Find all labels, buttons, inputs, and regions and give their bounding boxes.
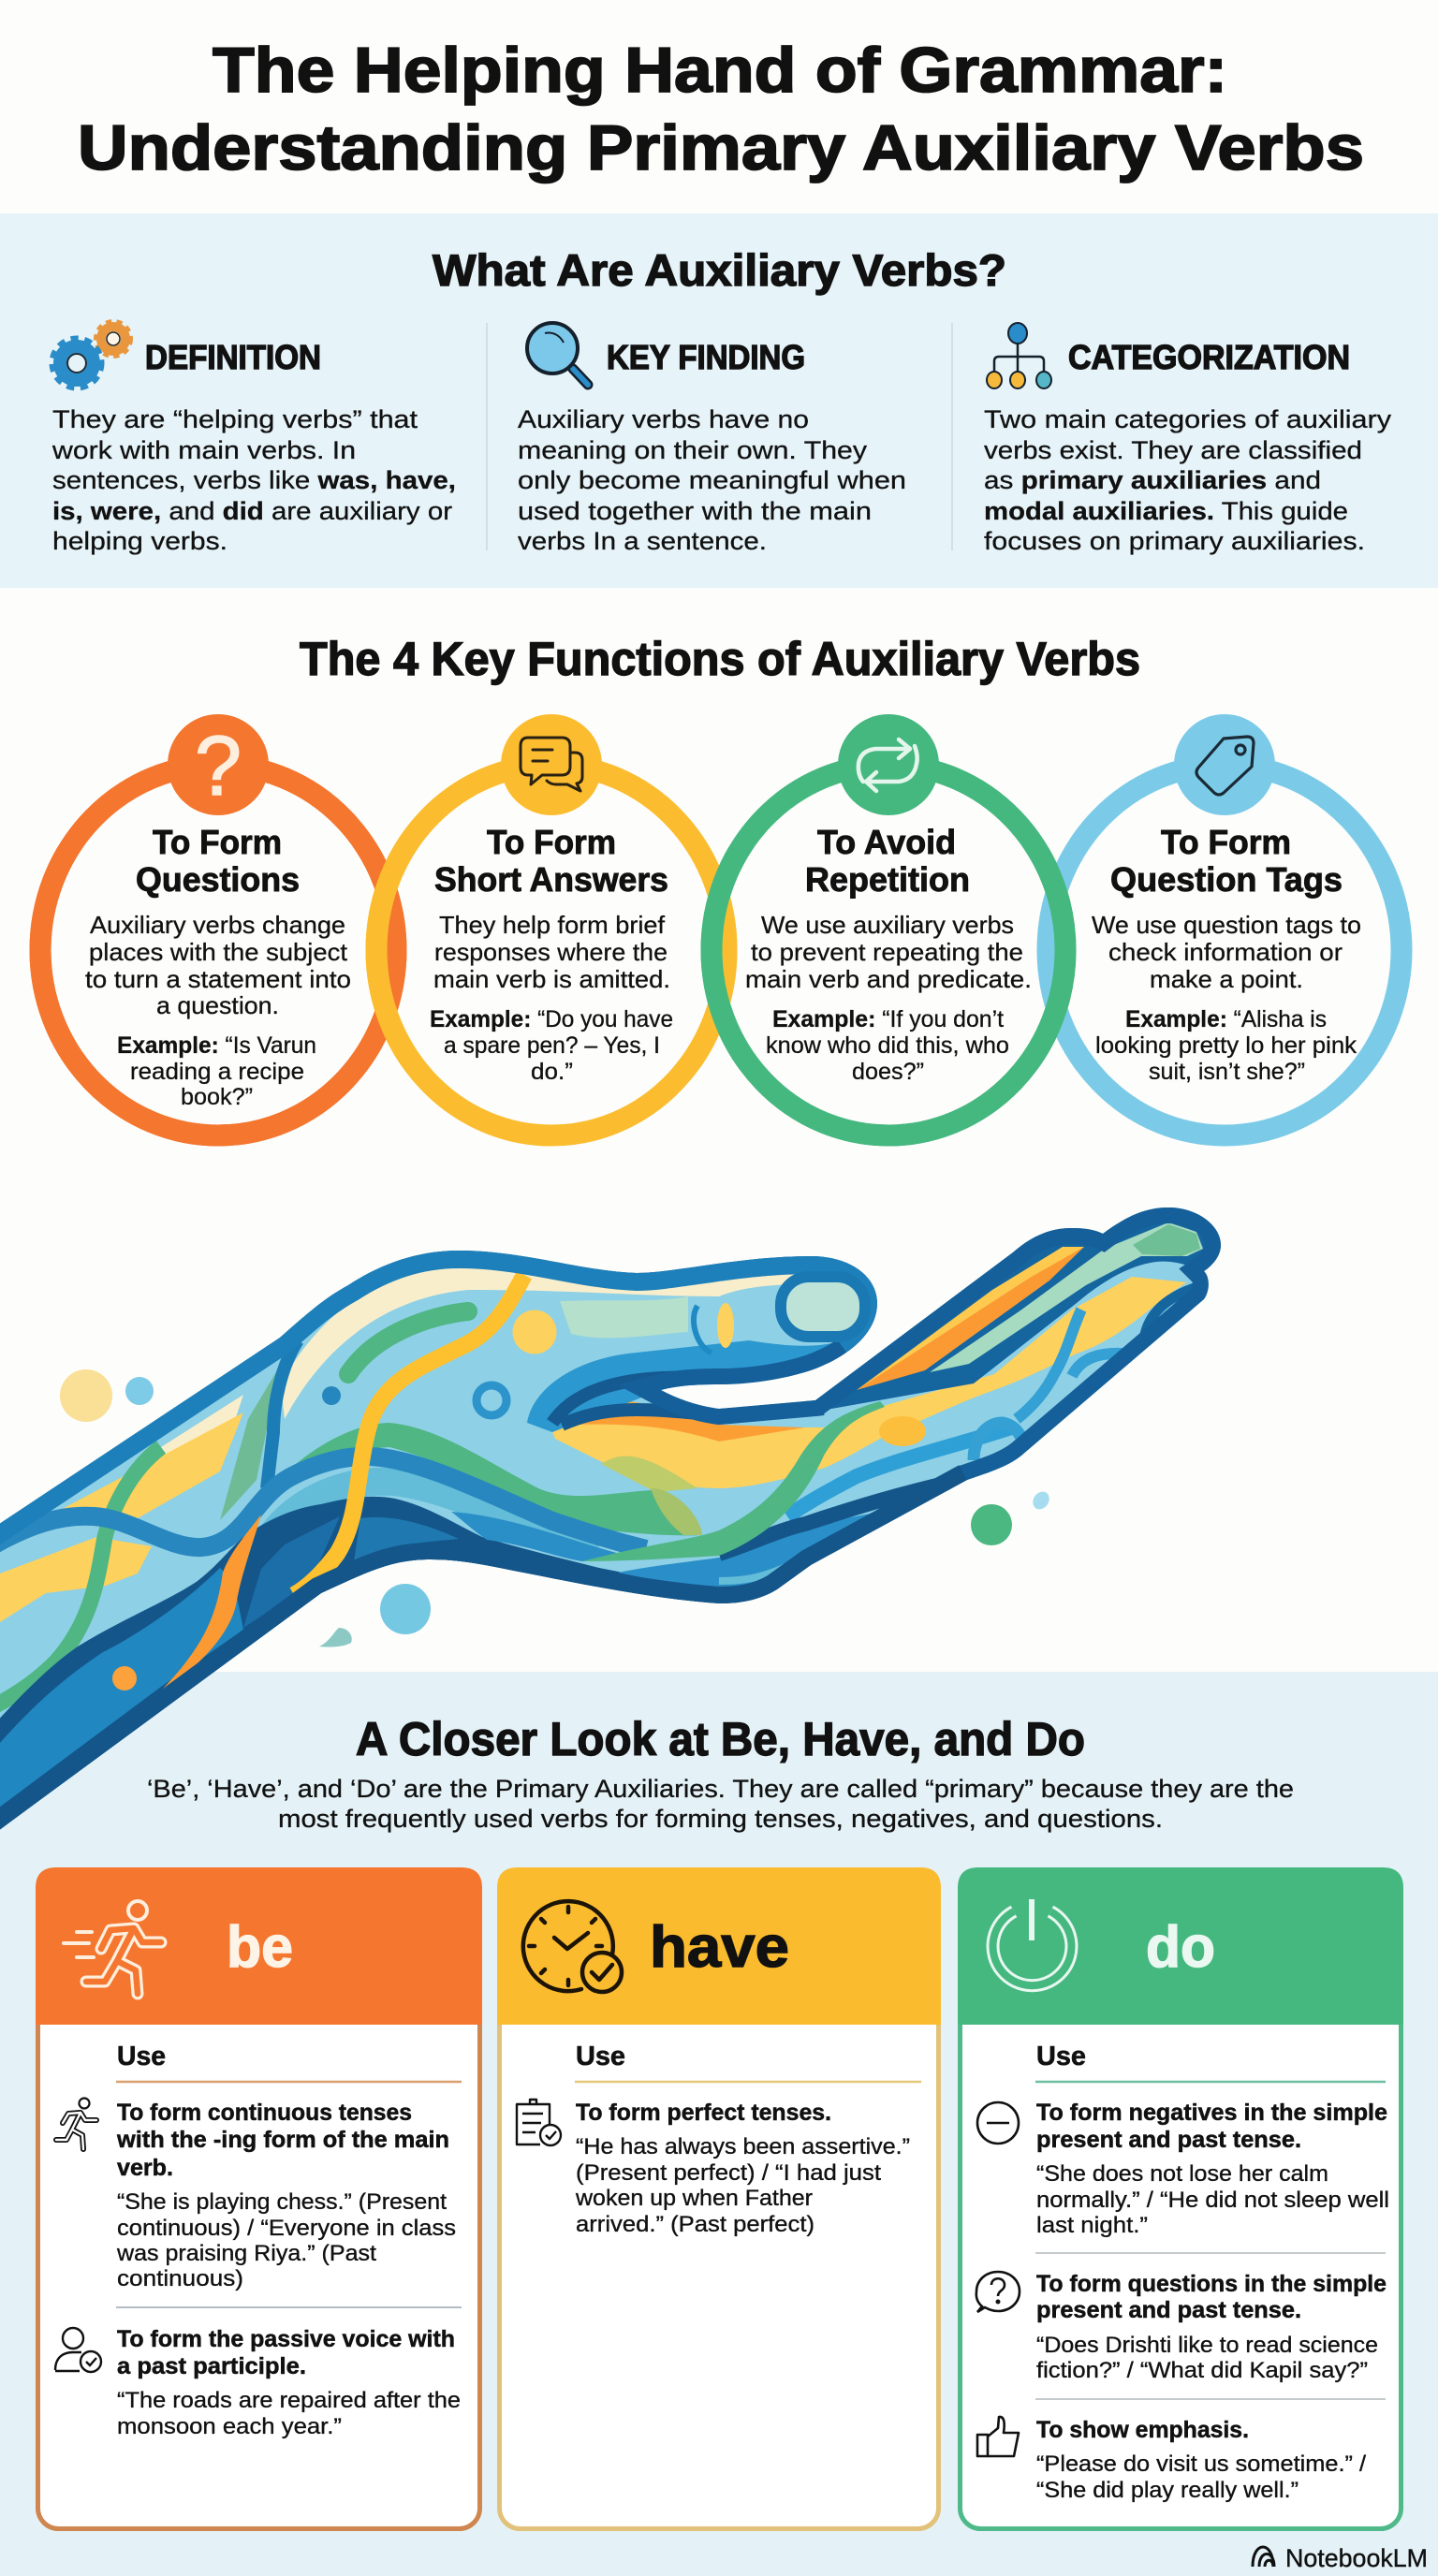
text: key finding body: verbs In a sentence. — [518, 527, 767, 555]
text: closer look intro: ‘Be’, ‘Have’, and ‘Do’ are the Primary Auxiliaries. They are called “primary” because they are the — [147, 1775, 1294, 1803]
text: questions — [1036, 2271, 1387, 2383]
icon: minus circle — [977, 2102, 1019, 2144]
text: to form short answers: responses where the — [434, 938, 668, 966]
text: passive voice: To form the passive voice with — [117, 2326, 455, 2352]
icon: gears — [52, 322, 130, 388]
text: to form questions: reading a recipe — [130, 1059, 304, 1085]
text: passive voice — [117, 2326, 461, 2439]
text: to avoid repetition: To Avoid — [817, 823, 956, 861]
text: to avoid repetition: know who did this, who — [766, 1032, 1009, 1059]
text: continuous tenses: “She is playing chess.” (Present — [117, 2189, 447, 2215]
text: continuous tenses: with the -ing form of the main — [116, 2127, 449, 2153]
icon: clock with check — [523, 1901, 622, 1992]
text: to form question tags: Example: “Alisha is — [1125, 1006, 1327, 1032]
text: to form short answers: They help form brief — [439, 911, 666, 939]
title: Understanding Primary Auxiliary Verbs — [78, 112, 1364, 183]
text: to form short answers: do.” — [531, 1059, 573, 1085]
label: do: do — [1146, 1915, 1215, 1980]
panel: be card — [36, 1867, 482, 2529]
icon: user check — [55, 2328, 101, 2372]
text: negatives — [1036, 2100, 1389, 2238]
text: categorization body: focuses on primary auxiliaries. — [984, 527, 1365, 555]
header: have — [497, 1867, 941, 2025]
green veins — [220, 1366, 280, 1520]
text: negatives: “She does not lose her calm — [1036, 2161, 1328, 2187]
text: continuous tenses: continuous) / “Everyone in class — [117, 2216, 456, 2241]
text: emphasis — [1036, 2417, 1366, 2503]
cream and pale patches — [281, 1259, 805, 1419]
text: to form questions: a question. — [156, 991, 279, 1019]
ring: yellow — [376, 714, 726, 1135]
text: continuous tenses: To form continuous tenses — [117, 2100, 412, 2126]
text: to avoid repetition: Example: “If you don’t — [772, 1006, 1004, 1032]
text: definition body: sentences, verbs like was, have, — [52, 466, 456, 494]
text: to avoid repetition: Repetition — [805, 860, 970, 899]
title: The Helping Hand of Grammar: — [213, 35, 1227, 106]
text: to form question tags: To Form — [1161, 823, 1291, 861]
text: perfect tenses: To form perfect tenses. — [576, 2100, 831, 2126]
text: passive voice: “The roads are repaired after the — [117, 2388, 461, 2413]
text: to form short answers: main verb is amitted. — [433, 965, 670, 993]
text: emphasis: To show emphasis. — [1036, 2417, 1249, 2443]
text: to avoid repetition: We use auxiliary verbs — [761, 911, 1014, 939]
text: key finding body — [518, 405, 906, 555]
text: perfect tenses: woken up when Father — [575, 2186, 813, 2211]
ring: green — [712, 714, 1065, 1135]
text: questions: fiction?” / “What did Kapil say?” — [1036, 2358, 1368, 2383]
text: to form short answers: Example: “Do you have — [430, 1006, 673, 1032]
text: to form question tags: suit, isn’t she?” — [1149, 1059, 1305, 1085]
text: key finding body: meaning on their own. They — [518, 436, 868, 464]
text: to form short answers — [430, 823, 673, 1085]
fingers — [805, 1198, 1236, 1413]
text: perfect tenses: arrived.” (Past perfect) — [576, 2212, 814, 2237]
text: closer look intro: most frequently used verbs for forming tenses, negatives, and questions. — [278, 1805, 1163, 1833]
icon: thumbs up — [977, 2417, 1019, 2456]
text: definition body: helping verbs. — [52, 527, 227, 555]
lower right layers — [787, 1427, 1011, 1516]
text: to form short answers: To Form — [487, 823, 616, 861]
icon: magnifier — [527, 323, 588, 385]
icon: runner — [64, 1901, 161, 1994]
text: key finding body: Auxiliary verbs have no — [518, 405, 809, 433]
text: definition body: They are “helping verbs” that — [52, 405, 418, 433]
text: emphasis: “She did play really well.” — [1036, 2478, 1299, 2503]
text: questions: “Does Drishti like to read science — [1036, 2333, 1378, 2358]
text: passive voice: monsoon each year.” — [117, 2414, 342, 2439]
text: to form questions: to turn a statement into — [85, 965, 351, 993]
text: to form question tags: Question Tags — [1110, 860, 1343, 899]
icon: chat bubbles — [521, 738, 582, 791]
text: perfect tenses: (Present perfect) / “I had just — [576, 2160, 881, 2186]
label: have: have — [650, 1915, 789, 1980]
illustration: helping hand — [0, 1198, 1236, 1872]
circles on arm — [513, 1310, 556, 1354]
text: to avoid repetition: does?” — [852, 1059, 924, 1085]
text: negatives: To form negatives in the simple — [1036, 2100, 1387, 2126]
heading: key finding: KEY FINDING — [607, 338, 805, 376]
footer: NotebookLM logo: NotebookLM — [1285, 2544, 1428, 2572]
heading: 4 key functions: The 4 Key Functions of Auxiliary Verbs — [300, 633, 1140, 685]
text: continuous tenses: verb. — [117, 2155, 173, 2181]
text: to form questions: book?” — [181, 1084, 253, 1110]
yellow arm patches — [62, 1412, 243, 1518]
ring: blue — [1048, 714, 1401, 1135]
yellow vine and orange streak — [161, 1515, 261, 1690]
header: be — [36, 1867, 482, 2025]
text: categorization body: modal auxiliaries. This guide — [984, 497, 1348, 525]
text: to form question tags: looking pretty lo her pink — [1095, 1032, 1357, 1059]
palm — [550, 1277, 1187, 1488]
text: to form short answers: a spare pen? – Yes, I — [444, 1032, 660, 1059]
heading: a closer look: A Closer Look at Be, Have, and Do — [356, 1713, 1085, 1765]
chart: four overlapping function rings — [40, 714, 1401, 1135]
heading: categorization: CATEGORIZATION — [1068, 338, 1350, 376]
outline — [0, 1208, 1221, 1857]
icon: hierarchy — [987, 323, 1051, 388]
text: to form questions: Auxiliary verbs change — [90, 911, 345, 939]
header: do — [958, 1867, 1403, 2025]
text: categorization body — [984, 405, 1392, 555]
text: questions: present and past tense. — [1036, 2297, 1301, 2323]
heading: use: Use — [576, 2042, 625, 2071]
text: to form questions: Example: “Is Varun — [117, 1032, 316, 1059]
text: categorization body: Two main categories of auxiliary — [984, 405, 1392, 433]
text: negatives: last night.” — [1036, 2213, 1148, 2238]
ring: orange — [40, 714, 396, 1135]
text: definition body: is, were, and did are auxiliary or — [52, 497, 452, 525]
text: negatives: normally.” / “He did not sleep well — [1036, 2188, 1389, 2213]
text: perfect tenses — [575, 2100, 910, 2237]
text: categorization body: verbs exist. They are classified — [984, 436, 1362, 464]
panel: do card — [958, 1867, 1403, 2529]
text: negatives: present and past tense. — [1036, 2127, 1301, 2153]
title — [78, 35, 1364, 183]
heading: what are auxiliary verbs: What Are Auxiliary Verbs? — [433, 245, 1006, 295]
text: definition body: work with main verbs. In — [51, 436, 356, 464]
label: be: be — [227, 1915, 293, 1980]
icon: question bubble — [976, 2272, 1020, 2312]
thumb shade — [527, 1339, 847, 1432]
text: continuous tenses: continuous) — [117, 2266, 243, 2291]
text: to form question tags: make a point. — [1150, 965, 1303, 993]
text: to form question tags: check information or — [1108, 938, 1343, 966]
text: definition body — [51, 405, 456, 555]
icon: price tag — [1196, 737, 1254, 795]
text: to form questions: To Form — [153, 823, 282, 861]
icon: question mark: ? — [195, 720, 242, 813]
text: to form short answers: Short Answers — [434, 860, 668, 899]
text: perfect tenses: “He has always been assertive.” — [576, 2134, 910, 2159]
panel: closer look background — [0, 1672, 1438, 2576]
decorative dots around hand — [60, 1369, 1052, 1647]
panel: have card — [497, 1867, 941, 2529]
panel: what are auxiliary verbs — [0, 213, 1438, 588]
heading: use: Use — [1036, 2042, 1086, 2071]
text: to form question tags: We use question tags to — [1092, 911, 1361, 939]
icon: clipboard check — [517, 2100, 561, 2145]
thumbnail — [781, 1277, 865, 1337]
text: passive voice: a past participle. — [117, 2353, 306, 2379]
text: continuous tenses: was praising Riya.” (Past — [116, 2241, 376, 2266]
icon: small runner — [56, 2099, 96, 2149]
lower dark forearm — [0, 1496, 773, 1829]
text: emphasis: “Please do visit us sometime.” / — [1036, 2452, 1366, 2477]
text: key finding body: used together with the main — [518, 497, 872, 525]
text: categorization body: as primary auxiliaries and — [984, 466, 1321, 494]
text: to form question tags — [1092, 823, 1361, 1085]
icon: power — [992, 1899, 1071, 1985]
text: continuous tenses — [116, 2100, 456, 2291]
text: to form questions: places with the subject — [89, 938, 348, 966]
text: closer look intro — [147, 1775, 1294, 1833]
waves — [271, 1482, 599, 1544]
text: to avoid repetition — [745, 823, 1032, 1085]
text: to form questions — [85, 823, 351, 1110]
heading: definition: DEFINITION — [145, 338, 321, 376]
text: to avoid repetition: to prevent repeating the — [751, 938, 1023, 966]
icon: repeat arrows — [858, 739, 917, 791]
text: key finding body: only become meaningful when — [518, 466, 906, 494]
heading: use: Use — [117, 2042, 166, 2071]
text: questions: To form questions in the simple — [1036, 2271, 1387, 2297]
text: to avoid repetition: main verb and predicate. — [745, 965, 1032, 993]
text: to form questions: Questions — [136, 860, 300, 899]
